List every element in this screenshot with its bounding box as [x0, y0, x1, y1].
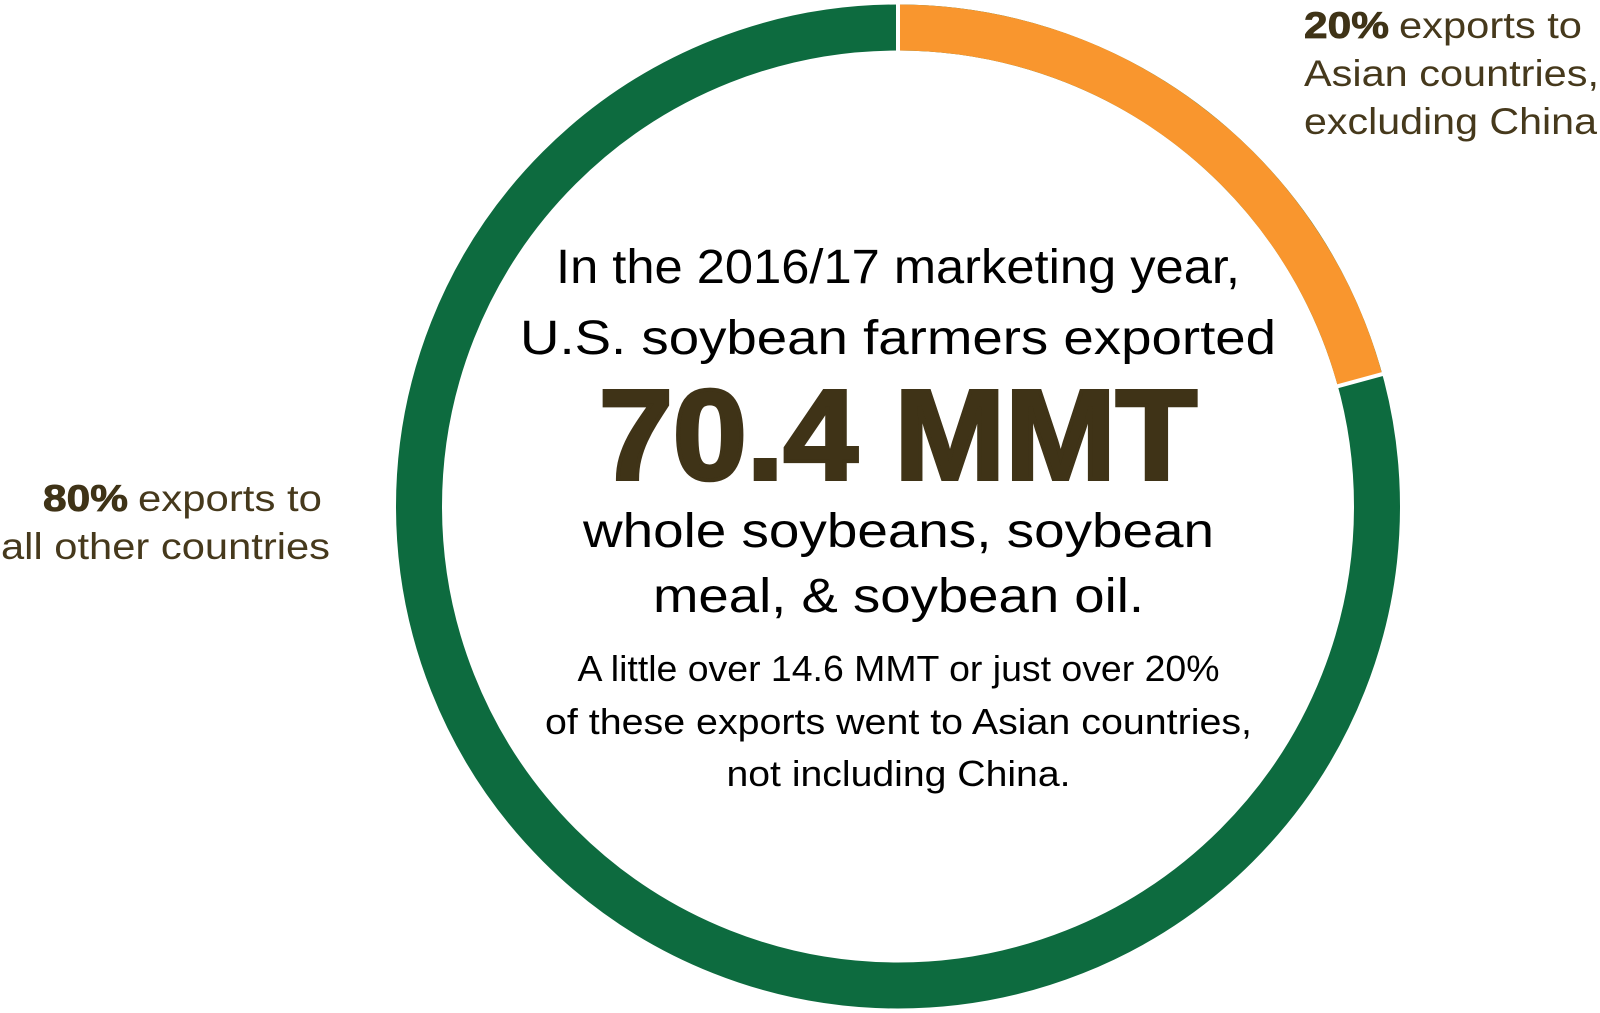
center detail text: [545, 648, 1252, 794]
center intro text: In the 2016/17 marketing year,: [556, 241, 1240, 294]
callout: 20% exports to Asian countries: Asian countries,: [1304, 53, 1599, 94]
center detail text: not including China.: [726, 753, 1070, 794]
callout: 20% exports to Asian countries: 20%: [1304, 5, 1389, 46]
center detail text: of these exports went to Asian countries,: [545, 701, 1252, 742]
callout: 80% exports to other countries: all other countries: [1, 526, 330, 567]
callout: 20% exports to Asian countries: excluding China: [1304, 101, 1597, 142]
callout: 80% exports to other countries: exports to: [138, 478, 322, 519]
center detail text: A little over 14.6 MMT or just over 20%: [578, 648, 1220, 689]
callout: 20% exports to Asian countries: [1304, 5, 1599, 142]
callout: 20% exports to Asian countries: exports to: [1399, 5, 1582, 46]
center intro text: [520, 241, 1276, 365]
segment: 20% Asian countries: [898, 28, 1360, 380]
center product text: [582, 505, 1214, 623]
big number: 70.4 MMT: 70.4 MMT: [599, 364, 1197, 507]
callout: 80% exports to other countries: [1, 478, 330, 567]
callout: 80% exports to other countries: 80%: [43, 478, 128, 519]
center product text: whole soybeans, soybean: [582, 505, 1214, 558]
center intro text: U.S. soybean farmers exported: [520, 312, 1276, 365]
segment separators: [898, 0, 1392, 387]
donut chart: [419, 0, 1392, 986]
center product text: meal, & soybean oil.: [653, 570, 1144, 623]
segment: 80% other countries: [419, 28, 1377, 986]
